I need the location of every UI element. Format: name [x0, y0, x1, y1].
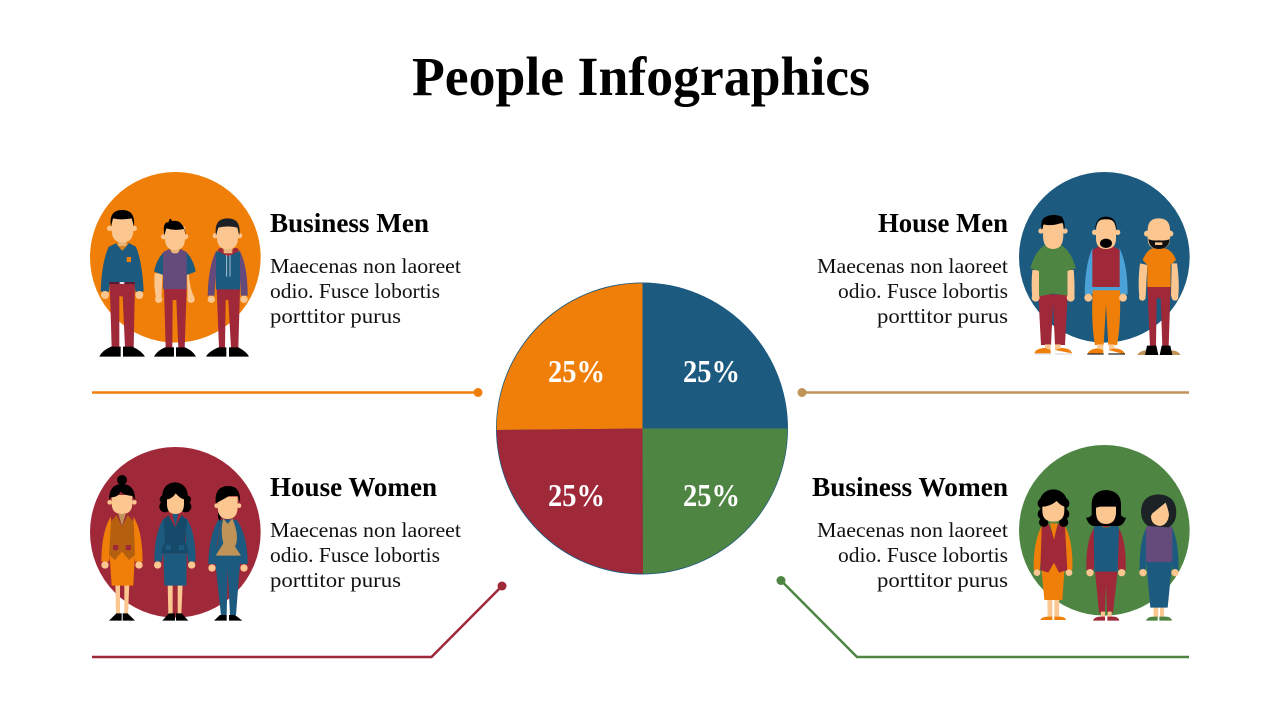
- heading: house men: House Men: [878, 208, 1008, 238]
- icon: three house men on blue circle: [1019, 172, 1190, 355]
- panel: house men: [817, 172, 1190, 355]
- icon: three business women on green circle: [1019, 445, 1190, 621]
- panel: house women: [90, 447, 461, 621]
- figure: woman in blue suit: [154, 482, 196, 621]
- text block: house men: [817, 254, 1008, 328]
- figure: man in red vest: [1084, 217, 1128, 355]
- connector: green line: [776, 576, 1189, 657]
- pie chart: [496, 282, 788, 574]
- text block: business women: odio. Fusce lobortis: [838, 543, 1008, 567]
- text block: business men: odio. Fusce lobortis: [270, 279, 440, 303]
- figure: bald man in orange tee: [1137, 218, 1180, 355]
- connector: red line: [92, 582, 506, 657]
- text block: business men: [270, 254, 461, 328]
- text block: business men: porttitor purus: [270, 304, 401, 328]
- figure: woman in orange dress: [101, 475, 143, 621]
- label: 25% top right: 25%: [683, 353, 740, 389]
- figure: man in hoodie: [206, 218, 249, 357]
- slice: red 25%: [497, 428, 643, 574]
- figure: woman in blue top: [1086, 490, 1126, 621]
- text block: business men: Maecenas non laoreet: [270, 254, 461, 278]
- text block: house women: [270, 518, 461, 592]
- connector: tan line: [798, 388, 1189, 397]
- label: 25% bottom right: 25%: [683, 477, 740, 513]
- panel: business men: [90, 172, 461, 357]
- text block: house men: odio. Fusce lobortis: [838, 279, 1008, 303]
- text block: house women: odio. Fusce lobortis: [270, 543, 440, 567]
- figure: woman in tan top: [208, 486, 248, 621]
- text block: house women: Maecenas non laoreet: [270, 518, 461, 542]
- text block: house women: porttitor purus: [270, 568, 401, 592]
- text block: house men: Maecenas non laoreet: [817, 254, 1008, 278]
- slice: orange 25%: [497, 283, 642, 430]
- heading: business men: Business Men: [270, 208, 429, 238]
- slice: blue 25%: [642, 283, 788, 428]
- text block: business women: [817, 518, 1008, 592]
- heading: business women: Business Women: [812, 472, 1008, 502]
- figure: woman in purple top and long skirt: [1139, 494, 1179, 621]
- label: 25% bottom left: 25%: [548, 477, 605, 513]
- figure: man in blue shirt: [99, 210, 145, 357]
- title: People Infographics: [412, 46, 870, 107]
- figure: man in purple tee: [154, 218, 196, 357]
- connector: orange line: [92, 388, 482, 397]
- icon: three business men on orange circle: [90, 172, 261, 357]
- label: 25% top left: 25%: [548, 353, 605, 389]
- figure: man in green shirt: [1030, 215, 1076, 355]
- heading: house women: House Women: [270, 472, 437, 502]
- slice: green 25%: [642, 428, 787, 574]
- panel: business women: [812, 445, 1190, 621]
- figure: woman in red vest: [1034, 489, 1072, 620]
- text block: business women: porttitor purus: [877, 568, 1008, 592]
- text block: business women: Maecenas non laoreet: [817, 518, 1008, 542]
- icon: three house women on red circle: [90, 447, 261, 621]
- text block: house men: porttitor purus: [877, 304, 1008, 328]
